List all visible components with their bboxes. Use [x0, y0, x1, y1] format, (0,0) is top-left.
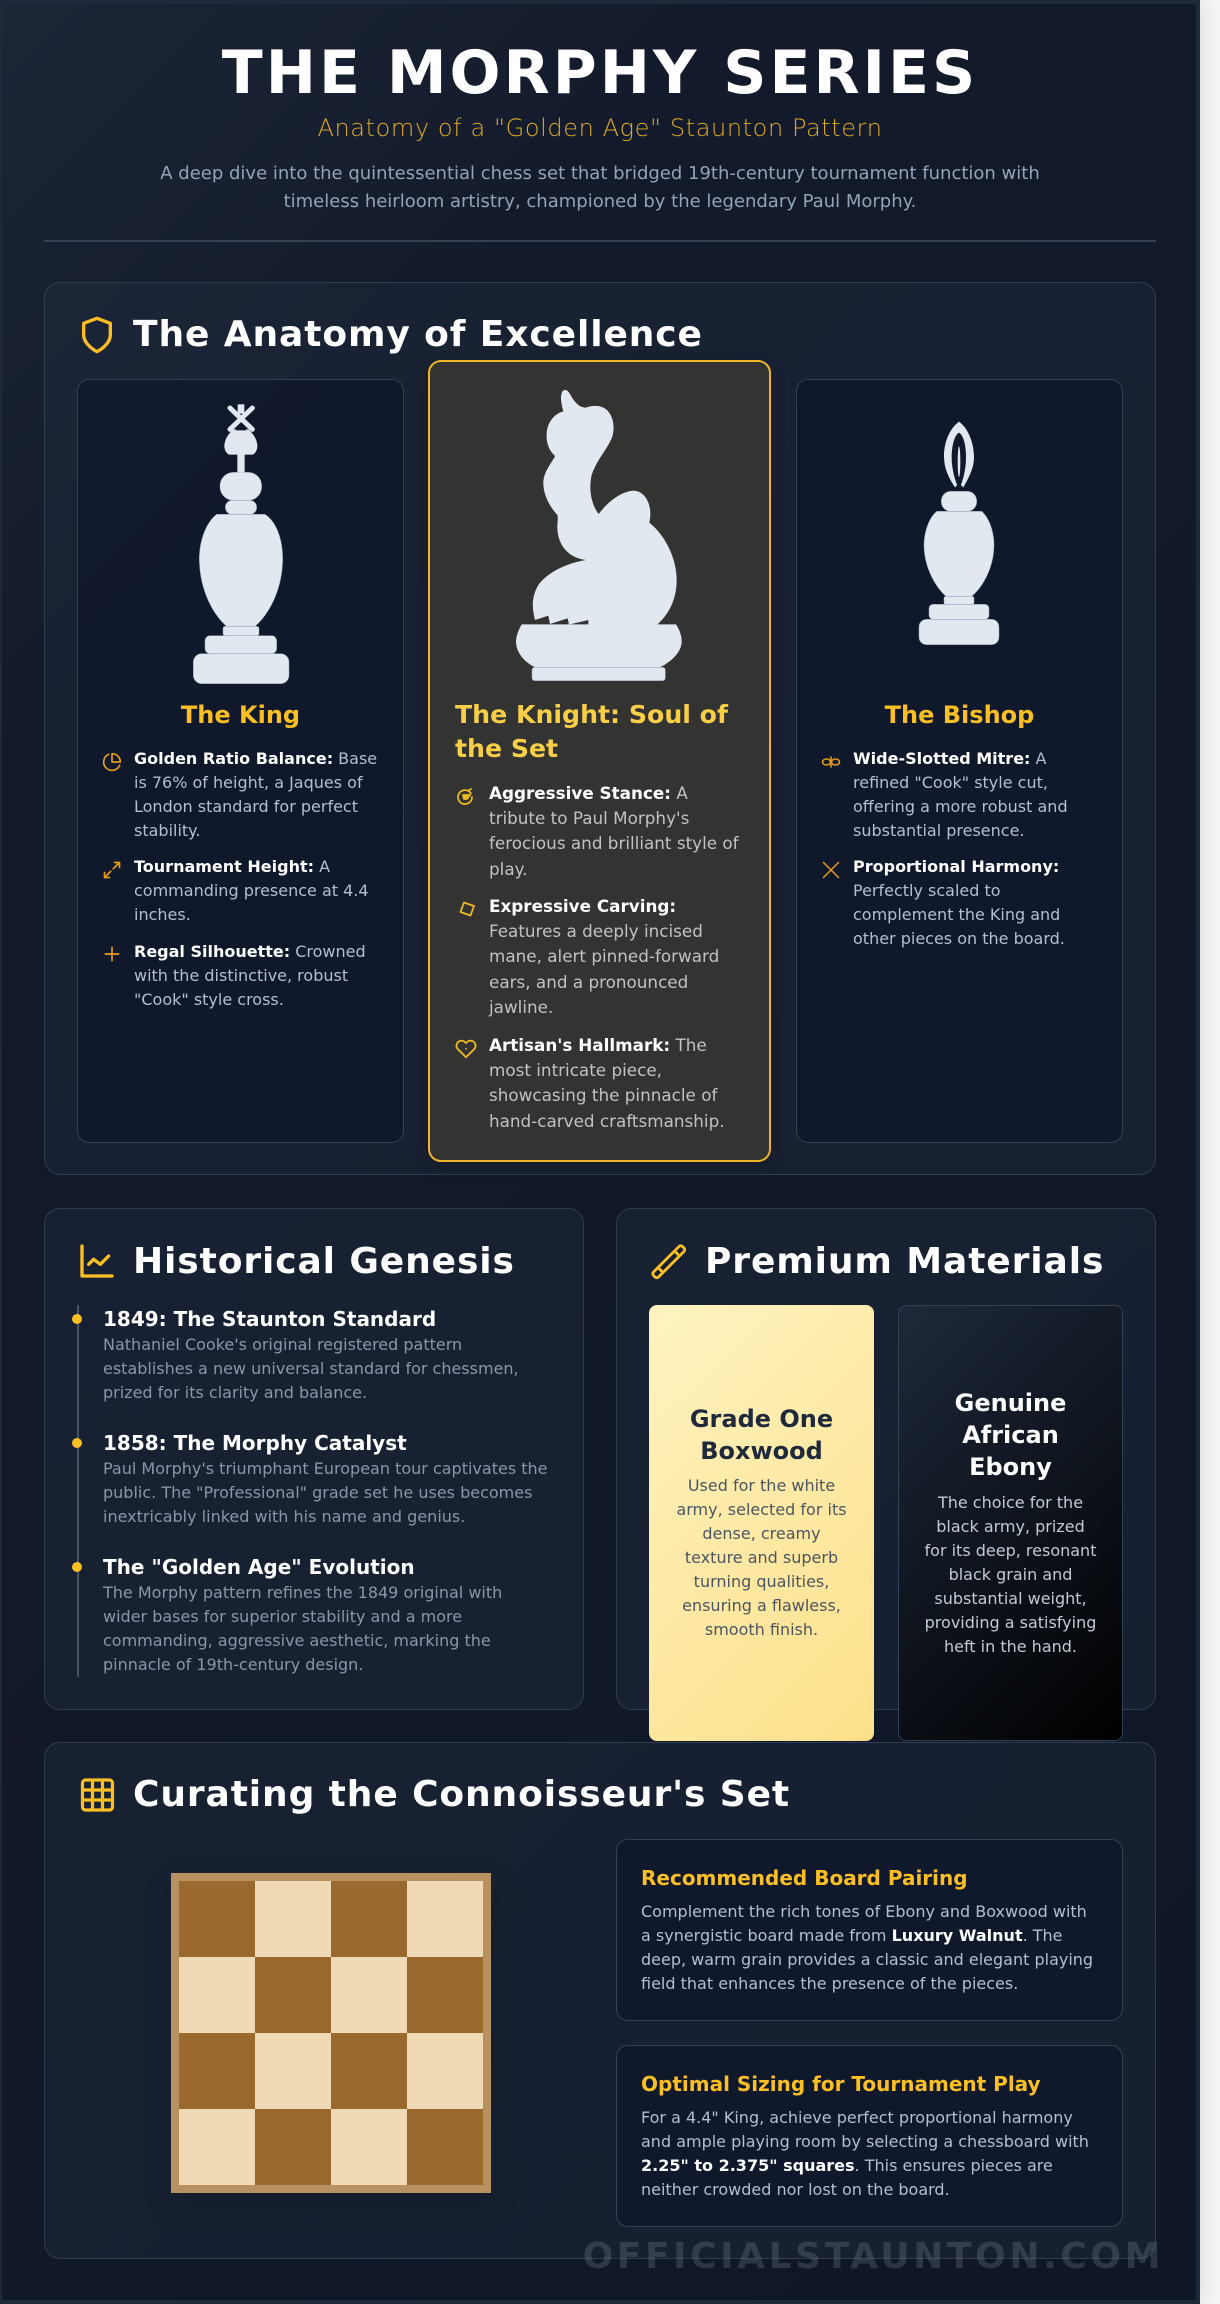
timeline title 3: The "Golden Age" Evolution [103, 1555, 415, 1579]
text: aggressive stance: ferocious and brilliant style of [489, 833, 739, 853]
card: optimal sizing [616, 2045, 1123, 2227]
intro text: A deep dive into the quintessential chess set that bridged 19th-century tournament function with [160, 163, 1040, 184]
heading: historical genesis: Historical Genesis [133, 1241, 515, 1282]
timeline title 1: 1849: The Staunton Standard [103, 1307, 436, 1331]
watermark: OFFICIALSTAUNTON.COM [583, 2236, 1164, 2277]
panel: premium materials [616, 1208, 1156, 1710]
text: wide-slotted mitre: offering a more robust and [853, 797, 1068, 816]
card: the knight [428, 360, 771, 1162]
timeline text 2: Paul Morphy's triumphant European tour captivates the [103, 1458, 548, 1478]
timeline dot 3 [72, 1562, 82, 1572]
text: ebony: substantial weight, [934, 1589, 1087, 1608]
text: golden ratio balance: London standard for perfect [134, 797, 358, 816]
timeline text 1: establishes a new universal standard for chessmen, [103, 1358, 519, 1378]
timeline dot 1 [72, 1314, 82, 1324]
icon: grid [80, 1778, 114, 1812]
text: golden ratio balance [134, 749, 377, 840]
icon: mitre slot [822, 756, 840, 768]
text: boxwood: dense, creamy [702, 1524, 821, 1543]
timeline text 3: commanding, aggressive aesthetic, marking the [103, 1630, 491, 1650]
text: artisan's hallmark: showcasing the pinnacle of [489, 1085, 717, 1105]
text: boxwood [676, 1476, 847, 1639]
text: regal silhouette: with the distinctive, robust [134, 966, 348, 985]
text: proportional harmony: complement the King and [853, 905, 1060, 924]
icon: expressive carving [460, 902, 475, 916]
text: boxwood: ensuring a flawless, [682, 1596, 841, 1615]
text: artisan's hallmark: hand-carved craftsmanship. [489, 1111, 725, 1131]
text: ebony [924, 1493, 1096, 1656]
timeline text 3: The Morphy pattern refines the 1849 original with [103, 1582, 502, 1602]
text: wide-slotted mitre: substantial presence. [853, 821, 1025, 840]
text: golden ratio balance: is 76% of height, a Jaques of [134, 773, 363, 792]
text: tournament height: Tournament Height: A [134, 857, 330, 876]
card: boxwood [649, 1305, 874, 1741]
heading: ebony [955, 1389, 1066, 1481]
text: board pairing: field that enhances the presence of the pieces. [641, 1974, 1018, 1992]
icon: plus cross [104, 946, 120, 962]
timeline text 2 [103, 1458, 548, 1526]
text: boxwood: army, selected for its [676, 1500, 847, 1519]
text: aggressive stance: Aggressive Stance: A [489, 783, 688, 803]
icon: aggressive stance [457, 788, 473, 805]
heading: anatomy of excellence: The Anatomy of Excellence [133, 314, 703, 355]
heading: boxwood: Grade One [690, 1405, 833, 1433]
text: boxwood: smooth finish. [705, 1620, 818, 1639]
text: regal silhouette: "Cook" style cross. [134, 990, 284, 1009]
panel: curating the connoisseur's set [44, 1742, 1156, 2259]
text: expressive carving: ears, and a pronounced [489, 972, 688, 992]
text: regal silhouette: Regal Silhouette: Crowned [134, 942, 366, 961]
text: ebony: black army, prized [936, 1517, 1085, 1536]
chessboard [171, 1873, 491, 2193]
text: artisan's hallmark: most intricate piece, [489, 1060, 662, 1080]
card: the king [77, 379, 404, 1142]
text: expressive carving: mane, alert pinned-forward [489, 946, 719, 966]
icon: king piece [193, 404, 290, 684]
text: boxwood: turning qualities, [694, 1572, 829, 1591]
text: board pairing: deep, warm grain provides a classic and elegant playing [641, 1950, 1093, 1968]
heading: the knight: the Set [455, 734, 558, 762]
text: optimal sizing: For a 4.4" King, achieve perfect proportional harmony [641, 2108, 1073, 2126]
panel: historical genesis [44, 1208, 584, 1710]
text: optimal sizing: and ample playing room by selecting a chessboard with [641, 2132, 1089, 2150]
text: ebony: heft in the hand. [944, 1637, 1077, 1656]
heading: the bishop: The Bishop [885, 701, 1034, 729]
text: aggressive stance: play. [489, 859, 527, 879]
text: artisan's hallmark [489, 1035, 725, 1131]
heading: the knight: The Knight: Soul of [455, 700, 728, 728]
heading: board pairing: Recommended Board Pairing [641, 1866, 968, 1890]
text: ebony: for its deep, resonant [925, 1541, 1096, 1560]
timeline text 3: pinnacle of 19th-century design. [103, 1654, 363, 1674]
text: aggressive stance: tribute to Paul Morphy's [489, 808, 689, 828]
icon: line chart [80, 1244, 114, 1278]
intro text [160, 163, 1040, 212]
text: regal silhouette [134, 942, 366, 1009]
heading: ebony: Genuine [955, 1389, 1066, 1417]
text: tournament height: inches. [134, 905, 191, 924]
timeline text 3: wider bases for superior stability and a more [103, 1606, 462, 1626]
icon: artisan heart [456, 1040, 476, 1058]
text: golden ratio balance: stability. [134, 821, 200, 840]
heading: ebony: Ebony [969, 1453, 1052, 1481]
heading: optimal sizing: Optimal Sizing for Tournament Play [641, 2072, 1041, 2096]
intro text: timeless heirloom artistry, championed by the legendary Paul Morphy. [284, 191, 916, 212]
timeline dot 2 [72, 1438, 82, 1448]
timeline text 2: inextricably linked with his name and genius. [103, 1506, 465, 1526]
text: ebony: providing a satisfying [925, 1613, 1096, 1632]
timeline text 3 [102, 1582, 502, 1674]
text: expressive carving: Expressive Carving: [489, 896, 676, 916]
heading: ebony: African [962, 1421, 1059, 1449]
heading: boxwood: Boxwood [700, 1436, 823, 1464]
text: golden ratio balance: Golden Ratio Balance: Base [134, 749, 377, 768]
text: proportional harmony: Perfectly scaled to [853, 881, 1001, 900]
icon: shield [82, 316, 112, 354]
heading: the knight [455, 700, 728, 762]
text: board pairing: a synergistic board made from Luxury Walnut. The [641, 1926, 1063, 1944]
text: boxwood: Used for the white [688, 1476, 835, 1495]
text: aggressive stance [489, 783, 739, 879]
text: expressive carving: jawline. [489, 997, 553, 1017]
heading: curating the connoisseur's set: Curating the Connoisseur's Set [133, 1774, 790, 1815]
card: board pairing [616, 1839, 1123, 2021]
text: optimal sizing: neither crowded nor lost on the board. [641, 2180, 950, 2198]
text: ebony: black grain and [949, 1565, 1072, 1584]
text: wide-slotted mitre: Wide-Slotted Mitre: A [853, 749, 1046, 768]
text: proportional harmony: Proportional Harmony: [853, 857, 1059, 876]
text: ebony: The choice for the [938, 1493, 1083, 1512]
timeline text 1: Nathaniel Cooke's original registered pattern [103, 1334, 462, 1354]
text: expressive carving: Features a deeply incised [489, 921, 703, 941]
text: board pairing [641, 1902, 1093, 1992]
heading: boxwood [690, 1405, 833, 1464]
panel: anatomy of excellence [44, 282, 1156, 1175]
title: THE MORPHY SERIES [222, 38, 978, 108]
heading: premium materials: Premium Materials [705, 1240, 1104, 1282]
card: the bishop [796, 379, 1123, 1142]
heading: the king: The King [181, 701, 300, 729]
text: expressive carving [488, 896, 719, 1017]
text: board pairing: Complement the rich tones of Ebony and Boxwood with [641, 1902, 1087, 1920]
text: optimal sizing: 2.25" to 2.375" squares. This ensures pieces are [641, 2156, 1053, 2174]
text: tournament height: commanding presence at 4.4 [134, 881, 369, 900]
timeline title 2: 1858: The Morphy Catalyst [103, 1431, 407, 1455]
subtitle: Anatomy of a "Golden Age" Staunton Pattern [317, 114, 883, 142]
timeline text 2: public. The "Professional" grade set he uses becomes [103, 1482, 532, 1502]
text: proportional harmony [853, 857, 1065, 948]
text: wide-slotted mitre [853, 749, 1068, 840]
card: ebony [898, 1305, 1123, 1741]
icon: pie chart [102, 752, 122, 772]
icon: knight piece [516, 390, 682, 681]
icon: cross lines [822, 862, 840, 878]
icon: bishop piece [918, 422, 1000, 645]
text: wide-slotted mitre: refined "Cook" style cut, [853, 773, 1048, 792]
timeline text 1: prized for its clarity and balance. [103, 1382, 367, 1402]
timeline text 1 [103, 1334, 519, 1402]
icon: expand arrows [104, 862, 120, 878]
text: artisan's hallmark: Artisan's Hallmark: The [489, 1035, 707, 1055]
text: proportional harmony: other pieces on the board. [853, 929, 1065, 948]
icon: ruler [651, 1244, 686, 1280]
text: boxwood: texture and superb [685, 1548, 838, 1567]
text: tournament height [134, 857, 369, 924]
text: optimal sizing [641, 2108, 1089, 2198]
